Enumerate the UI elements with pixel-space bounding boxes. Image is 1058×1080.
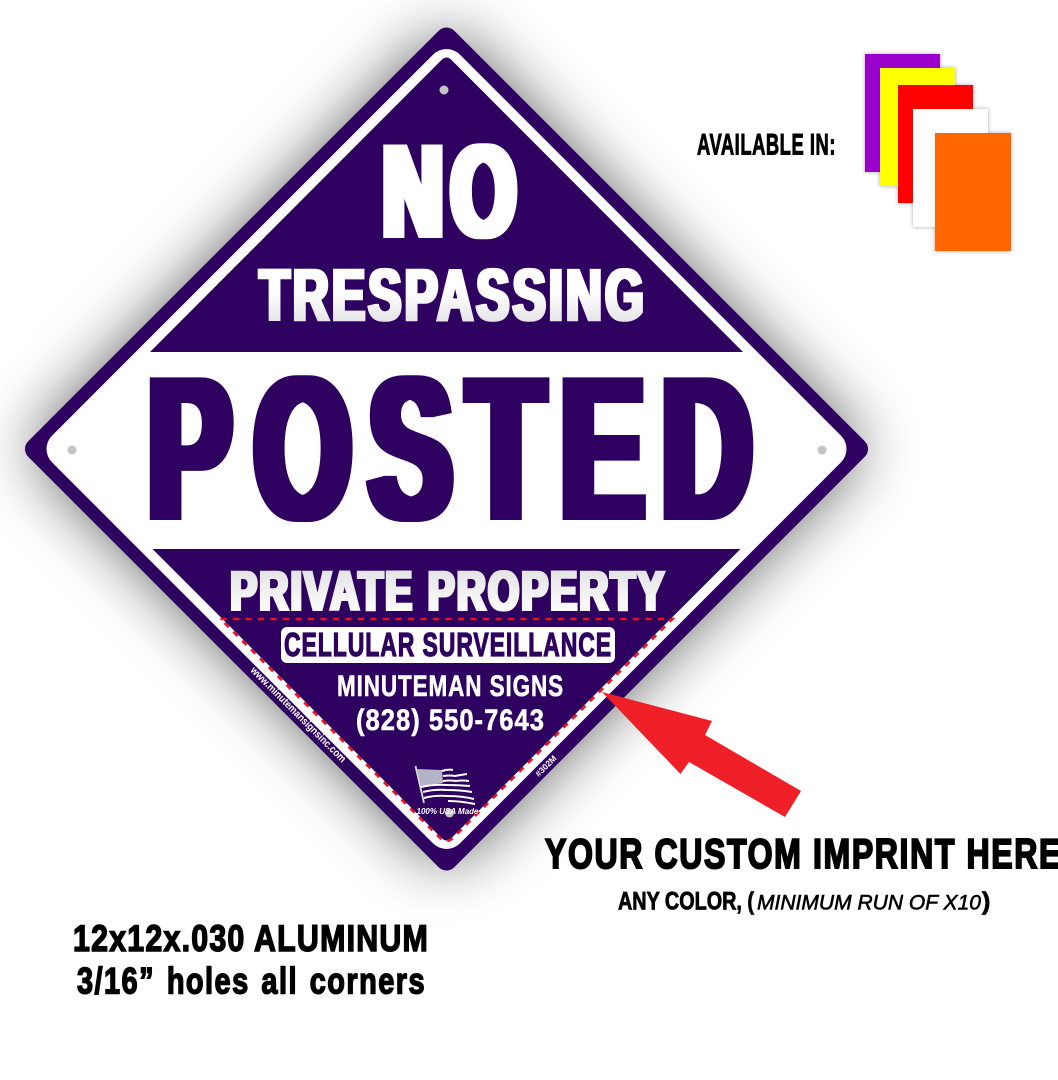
- lower purple triangle: [152, 549, 740, 840]
- purple outer border: [36, 38, 857, 860]
- cellular surveillance label: [281, 626, 615, 663]
- color swatches: [865, 54, 1011, 251]
- arrow: points to imprint area: [602, 692, 801, 817]
- spec: material: 12x12x.030 ALUMINUM: [73, 918, 429, 959]
- diamond sign: [36, 38, 857, 860]
- usa made caption: 100% USA Made: [416, 807, 479, 816]
- heading: PRIVATE PROPERTY: PRIVATE PROPERTY: [230, 559, 666, 622]
- callout note: any color: ANY COLOR, (: [618, 888, 755, 916]
- cellular surveillance label: CELLULAR SURVEILLANCE: [284, 626, 612, 663]
- swatch: white: [913, 109, 988, 227]
- swatch: red: [898, 85, 973, 203]
- heading: TRESPASSING: TRESPASSING: [260, 256, 647, 336]
- swatch: yellow: [880, 68, 955, 186]
- mounting holes: [68, 86, 826, 818]
- imprint dashed guide: [220, 619, 672, 841]
- callout note: any color: [618, 888, 990, 916]
- spec: holes: 3/16” holes all corners: [77, 960, 426, 1002]
- sign drop shadow: [31, 32, 862, 866]
- callout note: any color: ): [982, 888, 990, 916]
- swatch: orange: [935, 133, 1011, 251]
- website along edge: www.minutemansignsinc.com: [247, 664, 348, 765]
- label: available in: AVAILABLE IN:: [697, 128, 836, 162]
- product number: #302M: [533, 753, 559, 779]
- heading: NO: NO: [383, 118, 524, 264]
- heading: POSTED: POSTED: [148, 335, 752, 562]
- upper purple triangle: [150, 58, 743, 352]
- company name: MINUTEMAN SIGNS: [337, 670, 564, 703]
- callout note: any color: MINIMUM RUN OF X10: [757, 892, 981, 914]
- white inner diamond: [66, 68, 828, 830]
- phone number: (828) 550-7643: [356, 704, 545, 737]
- swatch: purple: [865, 54, 940, 172]
- icon: american flag: [416, 766, 475, 804]
